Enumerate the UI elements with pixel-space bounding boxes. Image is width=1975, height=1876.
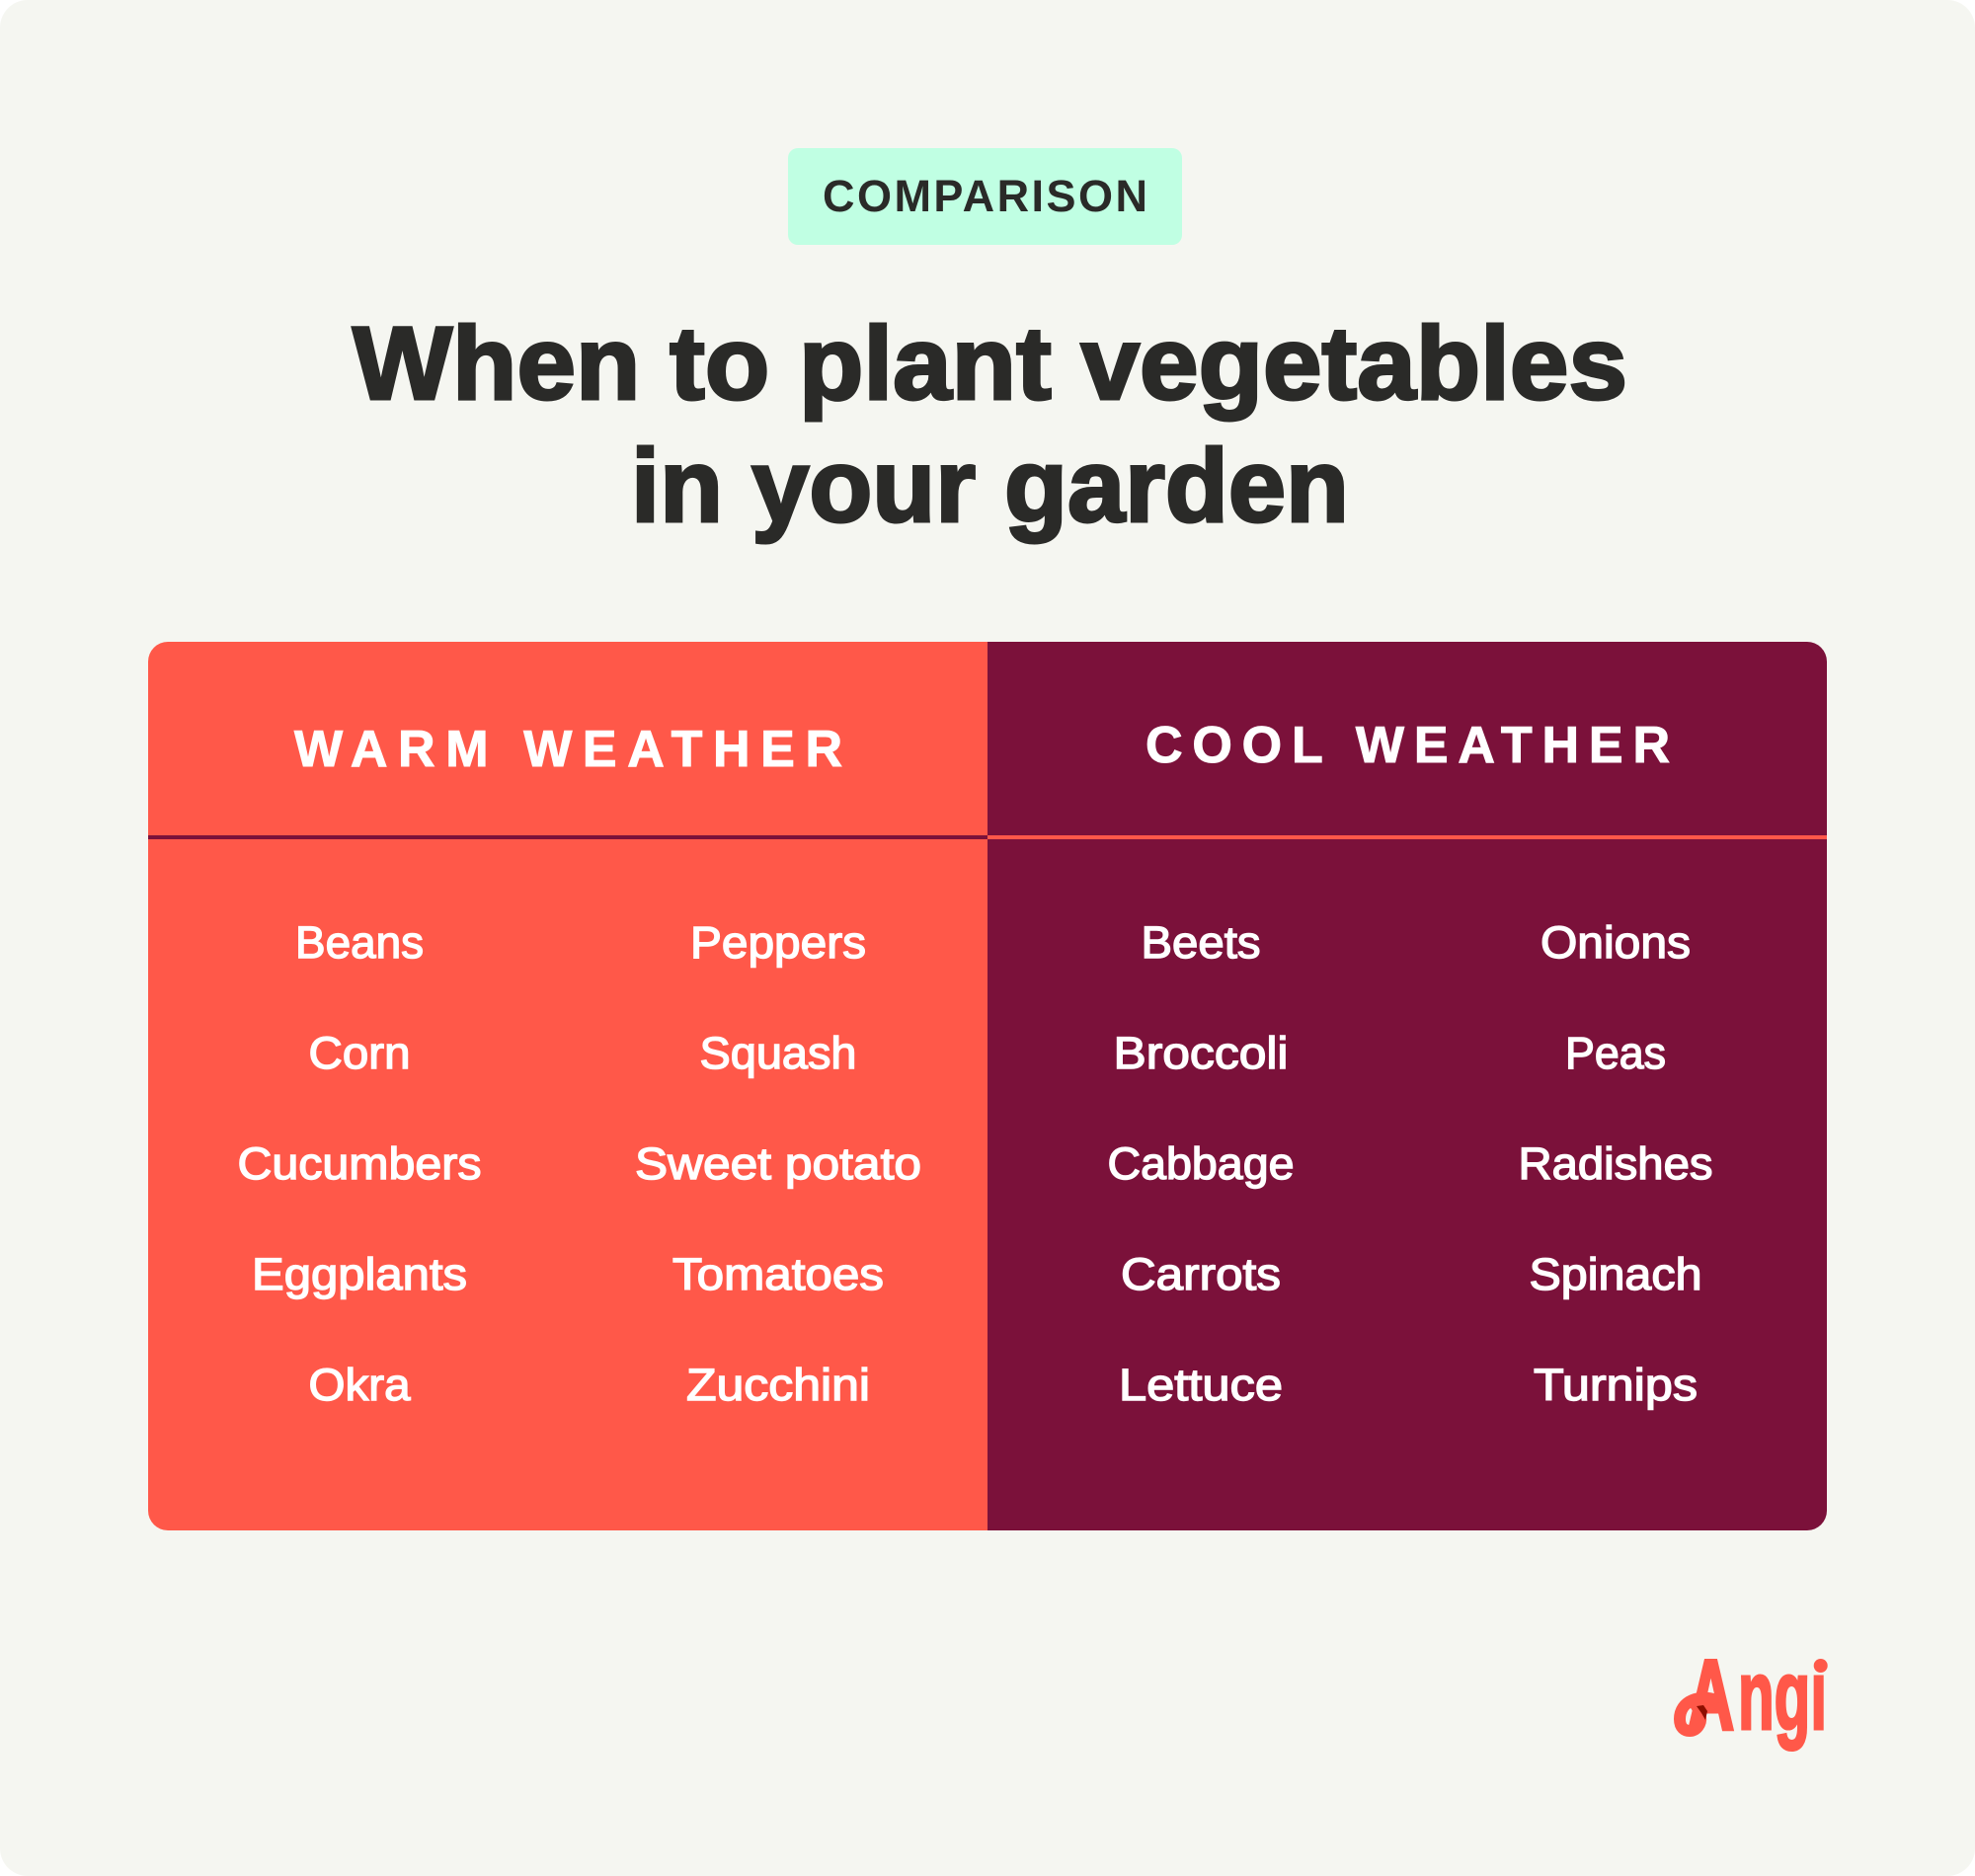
list: warm weather vegetables, column 1: Corn (308, 1028, 411, 1078)
list: cool weather vegetables, column 1: Lettuce (1119, 1360, 1283, 1410)
list: cool weather vegetables, column 2: Turnips (1534, 1360, 1698, 1410)
list: cool weather vegetables, column 1: Carrots (1121, 1249, 1281, 1299)
title: When to plant vegetables (353, 306, 1627, 422)
title: in your garden (631, 429, 1349, 544)
list: cool weather vegetables, column 2 (1519, 917, 1712, 1410)
list: cool weather vegetables, column 2: Spinach (1529, 1249, 1702, 1299)
list: cool weather vegetables, column 1: Cabbage (1108, 1138, 1294, 1189)
heading: warm weather: WARM WEATHER (294, 721, 842, 778)
list: warm weather vegetables, column 1: Eggplants (252, 1249, 467, 1299)
list: warm weather vegetables, column 1: Cucumbers (237, 1138, 482, 1189)
panel: cool weather (988, 642, 1827, 1530)
list: cool weather vegetables, column 2: Peas (1565, 1028, 1666, 1078)
logo: Angi: ngi (1738, 1640, 1827, 1751)
list: cool weather vegetables, column 1 (1108, 917, 1294, 1410)
title (353, 306, 1627, 544)
list: warm weather vegetables, column 2: Sweet potato (635, 1138, 921, 1189)
logo: Angi: A (1688, 1640, 1734, 1751)
tag: comparison: COMPARISON (823, 171, 1147, 221)
list: warm weather vegetables, column 2: Tomatoes (672, 1249, 884, 1299)
list: warm weather vegetables, column 1 (237, 917, 482, 1410)
list: cool weather vegetables, column 1: Beets (1142, 917, 1260, 968)
list: warm weather vegetables, column 2: Zucchini (686, 1360, 870, 1410)
panel: warm weather (148, 642, 988, 1530)
list: cool weather vegetables, column 1: Broccoli (1114, 1028, 1288, 1078)
list: warm weather vegetables, column 1: Beans (295, 917, 424, 968)
list: warm weather vegetables, column 2: Squash (699, 1028, 857, 1078)
heading: cool weather: COOL WEATHER (1146, 717, 1670, 774)
list: cool weather vegetables, column 2: Radishes (1519, 1138, 1712, 1189)
logo: Angi (1680, 1640, 1831, 1751)
tag: comparison (788, 148, 1182, 245)
list: cool weather vegetables, column 2: Onions (1540, 917, 1691, 968)
list: warm weather vegetables, column 2: Peppers (690, 917, 866, 968)
list: warm weather vegetables, column 2 (635, 917, 921, 1410)
list: warm weather vegetables, column 1: Okra (308, 1360, 412, 1410)
